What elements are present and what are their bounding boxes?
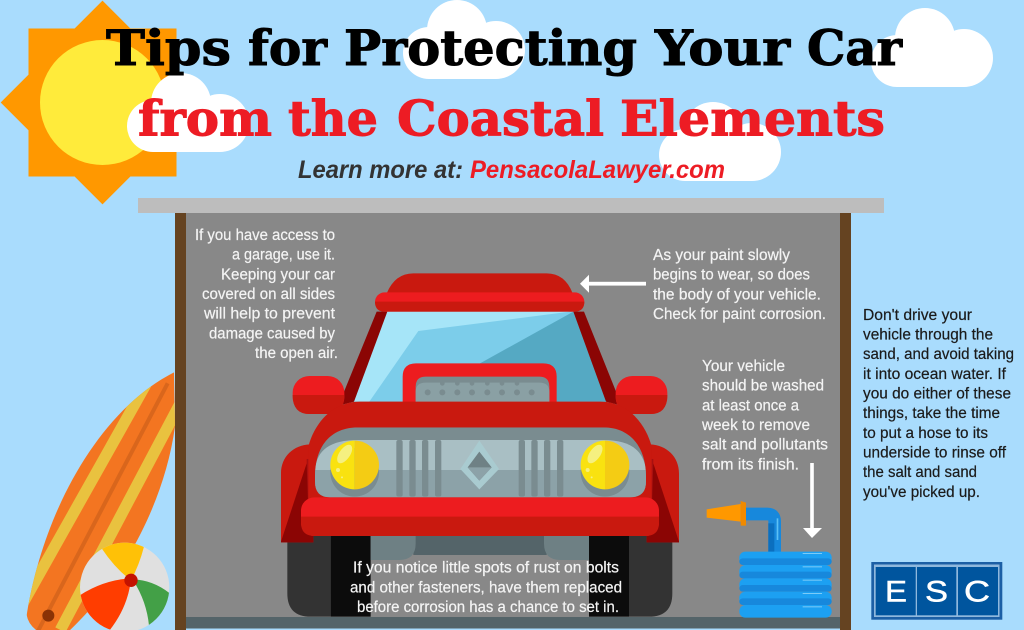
text: washing tip: at least once a <box>702 397 799 414</box>
hose coil <box>739 552 832 618</box>
text: sand and ocean tip: vehicle through the <box>863 326 993 344</box>
subtitle: learn more: Learn more at: <box>298 156 463 184</box>
logo: ESC: S <box>925 576 948 609</box>
text: sand and ocean tip: the salt and sand <box>863 464 977 481</box>
text: sand and ocean tip: Don't drive your <box>863 307 972 324</box>
text: sand and ocean tip: to put a hose to its <box>863 425 988 442</box>
title line 2: from <box>138 90 272 148</box>
roof <box>375 273 584 312</box>
left post <box>175 213 186 630</box>
nozzle <box>707 501 746 526</box>
text: sand and ocean tip: it into ocean water. If <box>863 366 1007 383</box>
text: washing tip <box>701 358 828 473</box>
title line 2: Elements <box>620 90 885 148</box>
windshield pillars <box>338 312 622 406</box>
text: garage tip: damage caused by <box>209 325 335 342</box>
bumper <box>301 497 659 536</box>
icon: beach ball <box>79 542 171 630</box>
text: rust tip: before corrosion has a chance to set in. <box>357 599 619 616</box>
side mirrors <box>293 376 667 414</box>
text: sand and ocean tip: things, take the time <box>863 405 1000 422</box>
hood scoop <box>403 363 557 403</box>
subtitle: learn more <box>298 156 725 184</box>
hood <box>308 402 652 500</box>
icon: sun <box>1 1 204 204</box>
arrow: to roof paint <box>580 275 646 293</box>
fenders <box>281 444 679 542</box>
illustration: red car <box>281 273 679 617</box>
title line 1: Protecting <box>344 19 637 77</box>
text: rust tip <box>350 560 622 616</box>
title line 1: Car <box>807 19 903 77</box>
title line 2: the <box>288 90 378 148</box>
windshield <box>354 312 606 402</box>
text: garage tip <box>195 227 338 362</box>
text: sand and ocean tip: underside to rinse off <box>863 444 1007 462</box>
emblem <box>460 441 499 489</box>
hose pipe <box>746 514 778 553</box>
text: washing tip: should be washed <box>702 378 824 395</box>
icon: surfboard <box>26 372 175 630</box>
text: washing tip: week to remove <box>701 417 810 434</box>
text: garage tip: covered on all sides <box>202 286 335 303</box>
text: garage tip: will help to prevent <box>203 306 336 323</box>
title line 1 <box>106 19 903 77</box>
logo: ESC: E <box>885 576 907 609</box>
right post <box>840 213 851 630</box>
icon: hose <box>707 501 832 618</box>
text: sand and ocean tip: sand, and avoid taking <box>863 346 1014 363</box>
title line 1: Tips <box>106 19 231 77</box>
text: sand and ocean tip: you've picked up. <box>863 484 980 501</box>
text: rust tip: If you notice little spots of rust on bolts <box>353 560 619 577</box>
undercarriage <box>371 536 589 560</box>
text: washing tip: from its finish. <box>702 456 799 473</box>
garage roof <box>138 198 884 213</box>
title line 1: Your <box>654 19 791 77</box>
title line 2: Coastal <box>397 90 604 148</box>
tires <box>287 536 672 617</box>
text: paint tip: the body of your vehicle. <box>653 286 821 303</box>
text: paint tip: begins to wear, so does <box>653 267 810 284</box>
garage floor <box>186 617 840 628</box>
text: paint tip <box>653 247 826 323</box>
text: garage tip: a garage, use it. <box>232 247 335 264</box>
text: garage tip: Keeping your car <box>221 266 335 283</box>
title line 1: for <box>248 19 328 77</box>
text: paint tip: Check for paint corrosion. <box>653 306 826 323</box>
subtitle: learn more: PensacolaLawyer.com <box>470 156 725 184</box>
arrow: down to hose <box>803 463 822 538</box>
text: sand and ocean tip: you do either of these <box>863 386 1011 402</box>
headlights <box>330 440 630 497</box>
grille bars <box>396 440 563 497</box>
text: washing tip: Your vehicle <box>702 358 785 375</box>
title line 2 <box>138 90 885 148</box>
garage wall <box>186 213 840 617</box>
text: sand and ocean tip <box>863 307 1014 501</box>
text: rust tip: and other fasteners, have them replaced <box>350 579 622 596</box>
text: garage tip: the open air. <box>255 345 338 362</box>
garage <box>138 198 884 630</box>
grille panel <box>313 427 647 498</box>
text: garage tip: If you have access to <box>195 227 335 244</box>
text: washing tip: salt and pollutants <box>702 437 828 454</box>
icon: clouds <box>127 0 993 181</box>
text: paint tip: As your paint slowly <box>653 247 790 264</box>
logo: ESC: C <box>964 576 990 609</box>
logo: ESC <box>871 562 1002 620</box>
